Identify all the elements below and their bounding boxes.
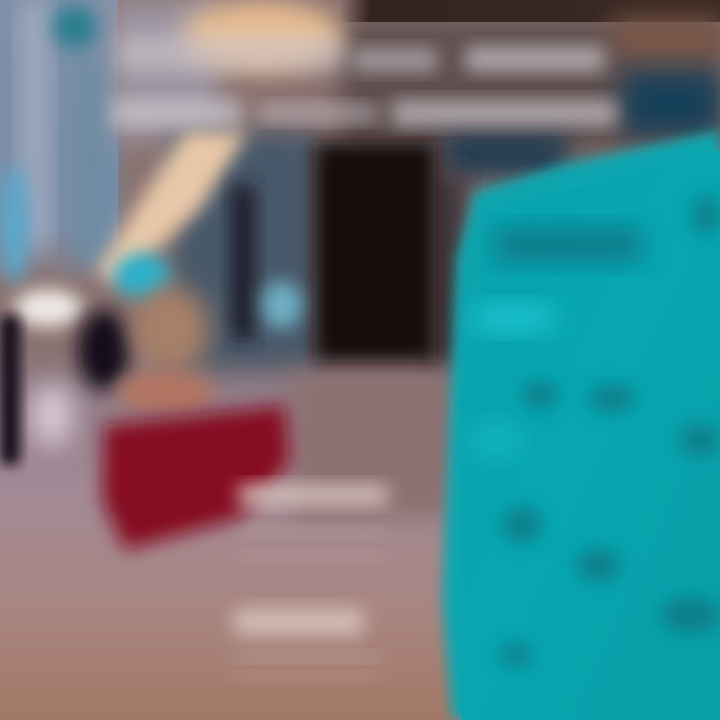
panel: teal text panel <box>442 130 720 720</box>
cyan highlight <box>114 254 170 298</box>
pale blue light <box>262 281 302 329</box>
light beam <box>96 130 248 285</box>
text marks <box>499 195 720 667</box>
light blue wall accent <box>0 165 28 285</box>
dark figure centre <box>78 310 130 390</box>
dark figure left <box>0 315 20 465</box>
teal ceiling accent <box>53 5 97 49</box>
highlight line <box>474 305 552 331</box>
headline text block <box>112 34 617 126</box>
dark column <box>230 185 256 340</box>
panel heading <box>494 228 642 262</box>
floor reflection <box>30 383 74 447</box>
ceiling glow <box>182 0 342 70</box>
red cube seat <box>102 405 290 550</box>
caption block: upper <box>238 484 388 560</box>
dark doorway <box>314 142 436 362</box>
highlight line lower <box>472 425 520 455</box>
seated figure <box>115 286 215 412</box>
caption block: lower <box>232 608 380 680</box>
white lamp <box>14 289 82 327</box>
